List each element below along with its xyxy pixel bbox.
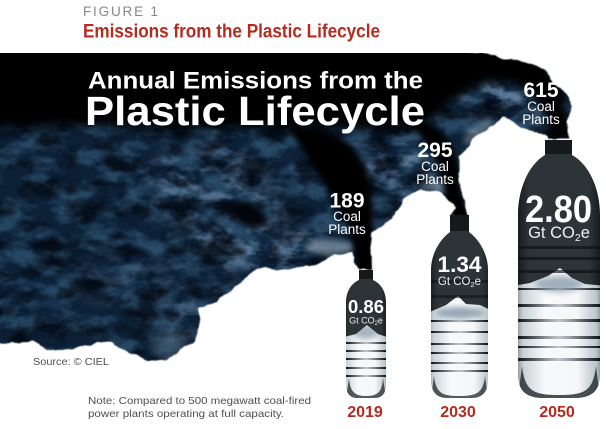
unit 2030: Gt CO [438,276,471,288]
year 2030: 2030 [440,404,476,421]
top black band [0,53,571,140]
unit 2050: Gt CO [528,224,575,242]
note [88,395,311,420]
note: power plants operating at full capacity. [88,408,284,420]
value 2030: 1.34 [438,252,482,277]
year 2050: 2050 [539,404,575,421]
label: 295 coal plants: Coal [421,159,449,174]
label: 295 coal plants: 295 [417,139,453,162]
value 2019: 0.86 [348,297,384,317]
smoke cloud [0,53,572,362]
note: Note: Compared to 500 megawatt coal-fired [88,395,311,407]
chart title: Annual Emissions from the [88,68,423,94]
label: 189 coal plants: Plants [328,222,366,237]
bottle 2019 [346,270,386,398]
figure label: FIGURE 1 [83,4,158,19]
label: 615 coal plants: Coal [527,99,555,114]
label: 189 coal plants [328,190,366,237]
year 2019: 2019 [347,404,383,421]
label: 615 coal plants [522,79,560,127]
unit 2030: 2 [471,280,475,289]
label: 295 coal plants: Plants [416,172,454,187]
label: 295 coal plants [416,139,454,187]
unit 2019: Gt CO [349,316,375,326]
label: 615 coal plants: Plants [522,112,560,127]
source: Source: © CIEL [33,356,109,368]
unit 2019: e [378,316,383,326]
figure heading: Emissions from the Plastic Lifecycle [83,22,380,42]
unit 2030: e [475,276,481,288]
label: 189 coal plants: Coal [333,209,361,224]
unit 2050: 2 [575,232,581,244]
bottle 2030 [431,215,488,398]
chart title: Plastic Lifecycle [85,88,425,134]
label: 615 coal plants: 615 [523,79,559,102]
bottle 2050 [518,140,600,398]
unit 2019: 2 [375,321,379,327]
value 2050: 2.80 [525,189,592,231]
unit 2050: e [581,224,590,242]
chart title [85,68,425,134]
label: 189 coal plants: 189 [329,190,365,212]
